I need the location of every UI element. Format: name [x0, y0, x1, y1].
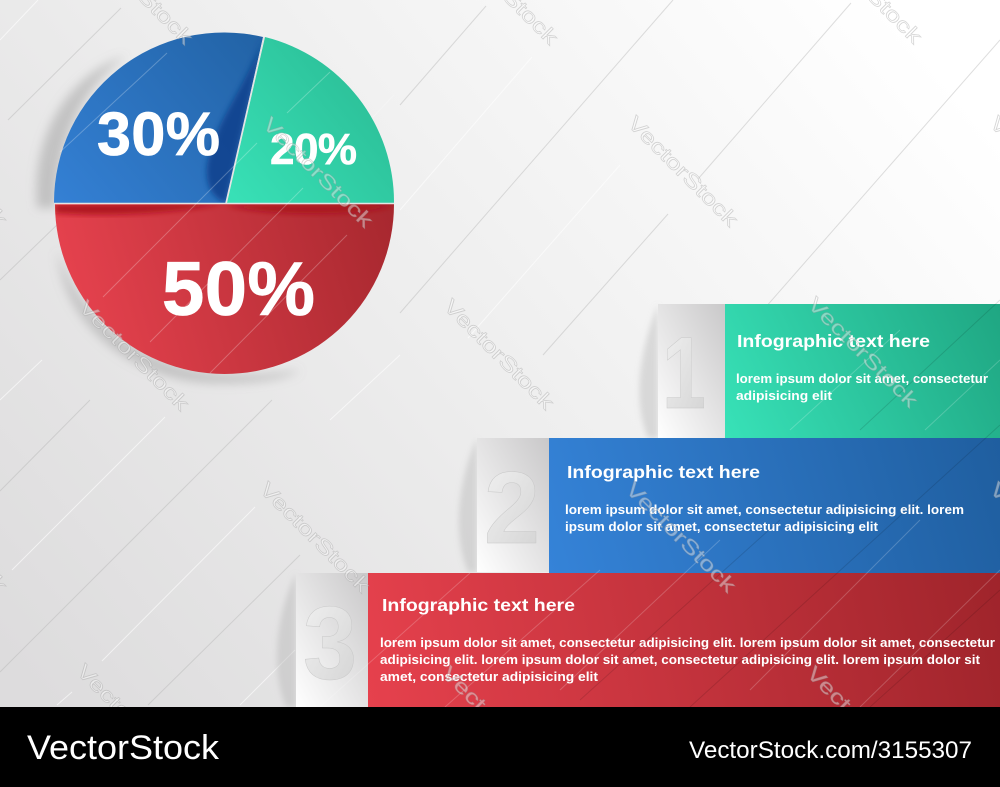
number 1: 1	[662, 316, 706, 430]
slice: 20% green	[227, 37, 394, 203]
slice: 30% blue	[54, 32, 263, 203]
watermarks: VectorStock	[803, 293, 923, 413]
body text 1	[736, 372, 988, 403]
watermarks: VectorStock	[255, 478, 375, 598]
watermarks: VectorStock	[258, 113, 378, 233]
banner 1	[725, 304, 1000, 438]
body text 2	[565, 503, 964, 534]
number 3: 3	[303, 586, 357, 702]
step 1	[639, 304, 1000, 438]
number 2: 2	[484, 451, 540, 565]
banner 3	[368, 573, 1000, 707]
watermarks: VectorStock	[72, 660, 192, 780]
label: 50%: 50%	[162, 247, 315, 332]
watermarks: VectorStock	[802, 662, 922, 782]
heading 1: Infographic text here	[737, 331, 930, 351]
label: 30%: 30%	[97, 100, 220, 168]
body text 3: amet, consectetur adipisicing elit	[380, 670, 599, 684]
number tile 1	[658, 304, 726, 438]
pie chart	[36, 32, 394, 383]
body text 2: lorem ipsum dolor sit amet, consectetur adipisicing elit. lorem	[565, 503, 964, 517]
watermarks: VectorStock	[623, 112, 743, 232]
tile shadow 3	[277, 573, 296, 707]
body text 3: adipisicing elit. lorem ipsum dolor sit amet, consectetur adipisicing elit. lorem ipsum dolor sit	[380, 653, 981, 667]
pie shadow	[36, 56, 300, 383]
tile shadow 1	[639, 304, 658, 438]
watermarks: VectorStock	[621, 478, 741, 598]
tile shadow 2	[459, 438, 477, 572]
footer image id: VectorStock.com/3155307	[689, 737, 972, 764]
watermarks: VectorStock	[74, 296, 194, 416]
number tile 2	[477, 438, 549, 572]
body text 1: adipisicing elit	[736, 389, 833, 403]
pie dividers	[54, 37, 394, 204]
banner 2	[549, 438, 1000, 573]
step 3	[277, 573, 1000, 707]
watermarks: VectorStock	[437, 662, 557, 782]
label: 20%: 20%	[270, 125, 357, 174]
slice: 50% red	[55, 204, 394, 374]
body text 1: lorem ipsum dolor sit amet, consectetur	[736, 372, 988, 386]
body text 2: ipsum dolor sit amet, consectetur adipisicing elit	[565, 520, 879, 534]
body text 3	[380, 636, 995, 684]
heading 3: Infographic text here	[382, 595, 575, 615]
footer bar	[0, 707, 1000, 787]
number tile 3	[296, 573, 368, 707]
footer logo text: VectorStock	[27, 729, 220, 767]
body text 3: lorem ipsum dolor sit amet, consectetur adipisicing elit. lorem ipsum dolor sit amet, consectetur	[380, 636, 995, 650]
heading 2: Infographic text here	[567, 462, 760, 482]
watermarks: VectorStock	[439, 295, 559, 415]
step 2	[459, 438, 1000, 573]
